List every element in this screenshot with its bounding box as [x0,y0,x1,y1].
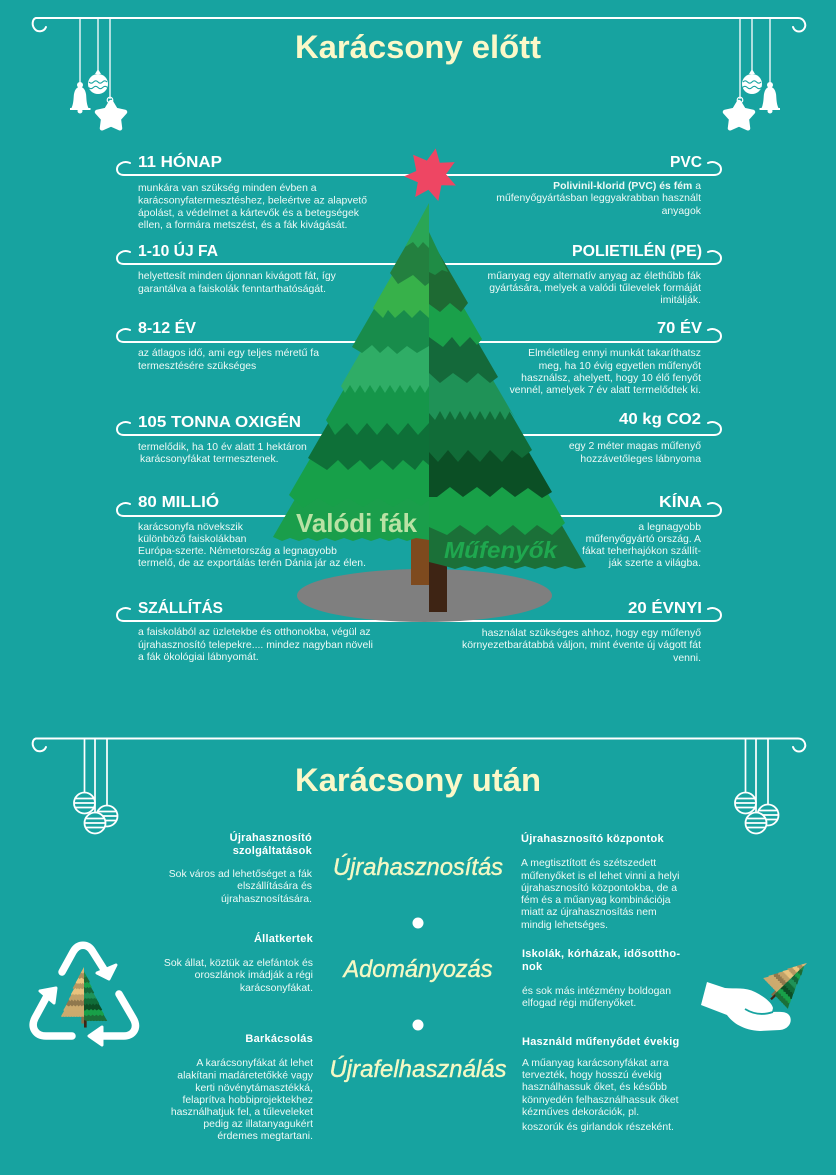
block: DIY: érdemes megtartani. [217,1131,313,1142]
block: recycling centres: fém és a műanyag kombinációja [521,895,671,906]
block: PVC: műfenyőgyártásban leggyakrabban használt [496,193,701,204]
block: 8-12 years [138,318,319,372]
block: 8-12 years: 8-12 ÉV [138,318,196,337]
block: polyethylene: POLIETILÉN (PE) [572,241,702,260]
ornaments: right star, ball and bell [725,18,780,128]
block: keep using your tree: tervezték, hogy hosszú évekig [522,1070,662,1081]
block: keep using your tree: A műanyag karácsonyfákat arra [522,1058,669,1069]
row rails left [117,162,429,621]
label: real trees: Valódi fák [296,508,418,538]
block: polyethylene [488,241,702,306]
block: 70 years: meg, ha 10 évig egyetlen műfenyőt [539,361,701,372]
row rails right [429,162,721,621]
center heading: donation: Adományozás [342,956,492,983]
block: 70 years: Elméletileg ennyi munkát takaríthatsz [528,348,701,359]
label: artificial trees: Műfenyők [444,537,558,563]
block: recycling centres: újrahasznosító központokba, de a [521,883,677,894]
block: 40 kg CO2: egy 2 méter magas műfenyő [569,441,701,452]
block: transport: a faiskolából az üzletekbe és otthonokba, végül az [138,627,371,638]
block: DIY [171,1033,314,1142]
block: DIY: alakítani madáretetőkké vagy [177,1070,314,1082]
block: transport: újrahasznosító telepekre.... mindez nagyban növeli [138,640,373,651]
block: keep using your tree: Használd műfenyődet évekig [522,1036,680,1048]
block: 20 years: 20 ÉVNYI [628,598,702,617]
block: 70 years: vennél, amelyek 7 év alatt termelődtek ki. [510,385,701,396]
block: 11 months: ápolást, a védelmet a kártevők és a betegségek [138,208,360,219]
block: China: ják szerte a világba. [608,558,701,569]
top rail with hooks [33,18,805,32]
block: zoos: Állatkertek [254,932,314,945]
second rail with hooks [33,738,805,752]
block: 11 months [138,152,367,231]
center heading: reuse: Újrafelhasználás [330,1056,506,1083]
ornaments: left bell, ball and star [70,18,125,128]
block: recycling services: Sok város ad lehetőséget a fák [169,869,313,880]
block: 1-10 new trees: helyettesít minden újonnan kivágott fát, így [138,271,337,282]
block: 1-10 new trees [138,241,337,295]
block: DIY: Barkácsolás [245,1033,313,1045]
icon: open hand holding small tree [701,949,821,1031]
block: 20 years: használat szükséges ahhoz, hogy egy műfenyő [482,628,701,639]
block: 1-10 new trees: garantálva a faiskolák fenntarthatóságát. [138,284,326,295]
block: transport: a fák ökológiai lábnyomát. [138,652,259,663]
block: 8-12 years: termesztésére szükséges [138,361,256,372]
block: 11 months: karácsonyfatermesztéshez, beleértve az alapvető [138,196,367,206]
block: 11 months: 11 HÓNAP [138,152,222,171]
block: recycling services: szolgáltatások [233,845,313,857]
block: DIY: használhatjuk fel, a tűleveleket [171,1107,313,1118]
block: recycling services: újrahasznosítására. [221,894,312,905]
block: PVC: anyagok [662,206,702,217]
block: DIY: felaprítva hobbiprojektekhez [182,1095,313,1106]
dot [412,918,424,928]
block: China: fákat teherhajókon szállít- [582,546,701,557]
block: schools, hospitals [522,948,680,1009]
block: 40 kg CO2: hozzávetőleges lábnyoma [580,454,701,465]
block: PVC: Polivinil-klorid (PVC) és fém a [553,181,701,192]
block: schools, hospitals: elfogad régi műfenyőket. [522,998,636,1009]
title: after Christmas: Karácsony után [295,762,541,798]
block: China: KÍNA [659,492,702,511]
block: 11 months: ellen, a formára metszést, és a fák kivágását. [138,220,347,231]
block: 105 tons of oxygen: termelődik, ha 10 év alatt 1 hektáron [138,442,307,453]
block: China: műfenyőgyártó ország. A [586,534,701,545]
block: keep using your tree: használhassuk őket, és később [522,1082,667,1093]
block: 40 kg CO2 [569,411,701,465]
block: schools, hospitals: Iskolák, kórházak, idősottho- [522,948,680,960]
dot [412,1020,424,1030]
block: 20 years: venni. [673,653,701,664]
block: recycling services: Újrahasznosító [230,831,312,844]
ground shadow ellipse [297,569,552,622]
block: 80 million: karácsonyfa növekszik [138,522,244,533]
block: 20 years [462,598,702,664]
block: 1-10 new trees: 1-10 ÚJ FA [138,241,218,260]
block: 8-12 years: az átlagos idő, ami egy teljes méretű fa [138,348,319,359]
block: 80 million: Európa-szerte. Németország a legnagyobb [138,546,337,557]
block: 70 years: használsz, ahelyett, hogy 10 élő fenyőt [521,373,701,384]
block: schools, hospitals: és sok más intézmény boldogan [522,986,671,997]
block: DIY: pedig az illatanyagukért [203,1119,313,1130]
block: recycling centres: mindig lehetséges. [521,920,608,931]
block: recycling centres: miatt az újrahasznosítás nem [521,907,657,918]
block: recycling services: elszállítására és [237,881,312,892]
block: zoos [164,932,314,994]
christmas tree split into real and artificial halves [273,203,586,612]
block: keep using your tree: kézműves dekorációk, pl. [522,1107,639,1118]
striped baubles left [74,738,118,834]
block: recycling services [169,831,313,905]
block: 105 tons of oxygen [138,412,307,465]
center heading: recycling: Újrahasznosítás [333,854,503,881]
block: zoos: oroszlánok imádják a régi [195,970,313,981]
block: PVC [496,154,702,217]
block: keep using your tree: könnyedén felhasználhassuk őket [522,1095,679,1106]
block: zoos: karácsonyfákat. [240,983,313,994]
block: 80 million [138,492,366,569]
block: 80 million: termelő, de az exportálás terén Dánia jár az élen. [138,558,366,569]
block: 20 years: környezetbarátabbá váljon, mint évente új vágott fát [462,640,701,651]
block: 11 months: munkára van szükség minden évben a [138,183,317,194]
block: China [582,492,702,569]
block: 80 million: különböző faiskolákban [138,534,247,545]
block: recycling centres: A megtisztított és szétszedett [521,858,656,869]
block: transport [138,598,373,663]
block: polyethylene: műanyag egy alternatív anyag az élethűbb fák [488,271,702,282]
block: schools, hospitals: nok [522,961,543,973]
block: keep using your tree: koszorúk és girlandok részeként. [522,1122,674,1133]
block: polyethylene: gyártására, melyek a valódi tűlevelek formáját [489,283,701,294]
block: polyethylene: imitálják. [660,295,701,306]
icon: recycling arrows with small tree [33,945,135,1045]
block: 80 million: 80 MILLIÓ [138,492,219,511]
striped baubles right [735,738,778,834]
block: recycling centres: műfenyőket is el lehet vinni a helyi [521,871,679,882]
block: 70 years: 70 ÉV [657,318,702,337]
title: before Christmas: Karácsony előtt [295,29,541,65]
block: zoos: Sok állat, köztük az elefántok és [164,958,313,969]
block: 70 years [510,318,702,396]
block: DIY: A karácsonyfákat át lehet [196,1058,313,1069]
block: 105 tons of oxygen: 105 TONNA OXIGÉN [138,412,301,431]
block: keep using your tree [522,1036,680,1133]
block: transport: SZÁLLÍTÁS [138,598,223,617]
block: PVC: PVC [670,154,702,171]
block: 40 kg CO2: 40 kg CO2 [619,411,701,428]
block: DIY: kerti növénytámasztékká, [195,1083,313,1094]
block: China: a legnagyobb [638,522,701,533]
block: 105 tons of oxygen: karácsonyfákat termesztenek. [140,454,279,465]
block: recycling centres: Újrahasznosító központok [521,832,665,845]
tree top star [404,148,456,201]
block: recycling centres [521,832,679,931]
